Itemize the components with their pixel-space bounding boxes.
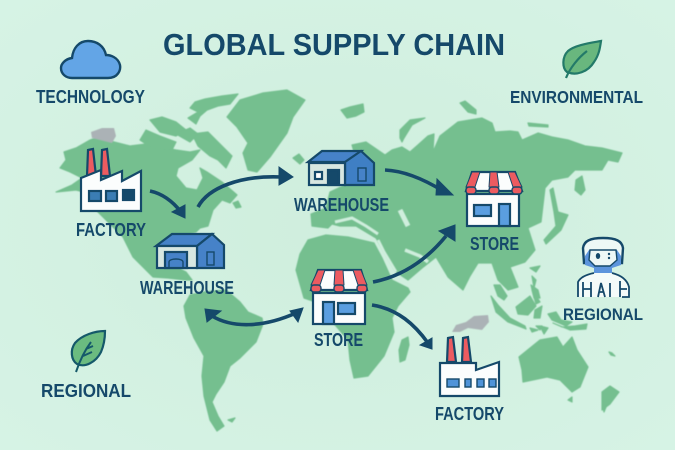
icon: factory south xyxy=(440,337,499,396)
arrow: factory to warehouse xyxy=(150,191,185,218)
Indonesia and Philippines xyxy=(491,285,587,334)
Japan and East Asia islands xyxy=(528,123,585,304)
icon: warehouse americas xyxy=(156,234,224,268)
North America xyxy=(56,136,237,280)
Australia xyxy=(519,337,588,392)
icon: regional leaf xyxy=(72,331,105,372)
Scandinavia xyxy=(400,118,425,142)
Falkland island xyxy=(228,418,235,422)
New Zealand and Tasmania xyxy=(568,386,619,412)
Arctic islands xyxy=(140,94,241,208)
label: store asia: STORE xyxy=(470,234,519,254)
label: environmental: ENVIRONMENTAL xyxy=(510,87,643,107)
icon: environmental leaf xyxy=(563,41,601,78)
arrow: europe to asia store xyxy=(385,170,453,195)
label: factory north america: FACTORY xyxy=(76,220,146,240)
label: warehouse americas: WAREHOUSE xyxy=(140,278,234,298)
title: GLOBAL SUPPLY CHAIN xyxy=(163,27,505,62)
icon: technology cloud xyxy=(61,41,120,78)
Eurasia xyxy=(311,118,622,290)
Svalbard xyxy=(341,101,476,118)
label: store africa: STORE xyxy=(314,330,363,350)
inland seas xyxy=(335,210,428,272)
smoke: north america xyxy=(91,128,116,143)
Africa xyxy=(296,235,410,378)
arrow: africa to south factory xyxy=(372,305,432,349)
Madagascar xyxy=(399,337,409,362)
label: warehouse europe: WAREHOUSE xyxy=(294,195,389,215)
label: technology: TECHNOLOGY xyxy=(36,87,145,107)
South America xyxy=(184,290,263,431)
icon: warehouse europe xyxy=(308,151,374,185)
label: regional right: REGIONAL xyxy=(563,305,643,324)
smoke: south factory xyxy=(452,315,489,332)
arrow: warehouse to europe xyxy=(198,167,293,207)
arrow: africa to asia store xyxy=(373,225,455,282)
label: factory south: FACTORY xyxy=(435,404,504,424)
Iceland xyxy=(293,154,304,164)
label: regional left: REGIONAL xyxy=(41,380,131,401)
icon: store asia xyxy=(466,172,522,226)
arrow: south america to africa two-way xyxy=(205,308,303,325)
icon: store africa xyxy=(311,270,367,324)
icon: astronaut xyxy=(578,238,629,297)
icon: factory north america xyxy=(81,149,141,211)
world map xyxy=(56,90,622,431)
Greenland xyxy=(227,90,305,172)
